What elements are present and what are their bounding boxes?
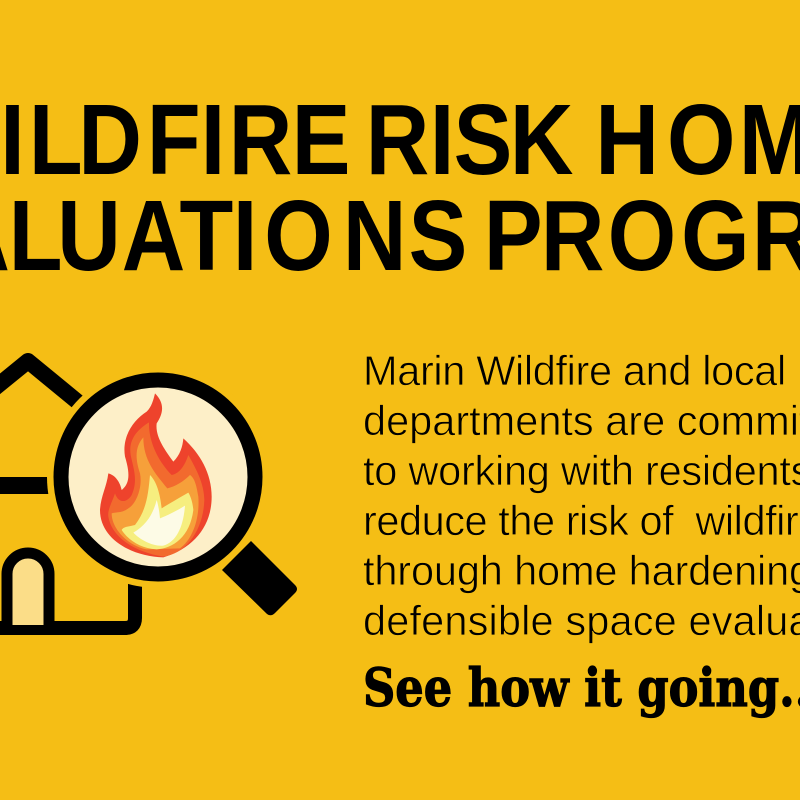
flame white core bbox=[133, 500, 185, 546]
house roof bbox=[0, 361, 90, 412]
house door bbox=[7, 553, 49, 625]
flame orange layer bbox=[108, 422, 204, 557]
flame red layer bbox=[100, 393, 212, 557]
house wall and floor bbox=[0, 560, 135, 628]
magnifier handle bbox=[222, 541, 297, 615]
flame yellow layer bbox=[122, 475, 193, 549]
icon: flame bbox=[100, 393, 212, 557]
icon: house bbox=[0, 361, 135, 628]
body text bbox=[363, 347, 800, 644]
magnifier lens bbox=[61, 380, 255, 574]
flame light orange layer bbox=[112, 437, 199, 549]
lens halo bbox=[47, 366, 269, 588]
title bbox=[0, 84, 800, 291]
house middle bar bbox=[0, 477, 70, 494]
icon: house with magnifying glass and flame bbox=[0, 361, 297, 628]
